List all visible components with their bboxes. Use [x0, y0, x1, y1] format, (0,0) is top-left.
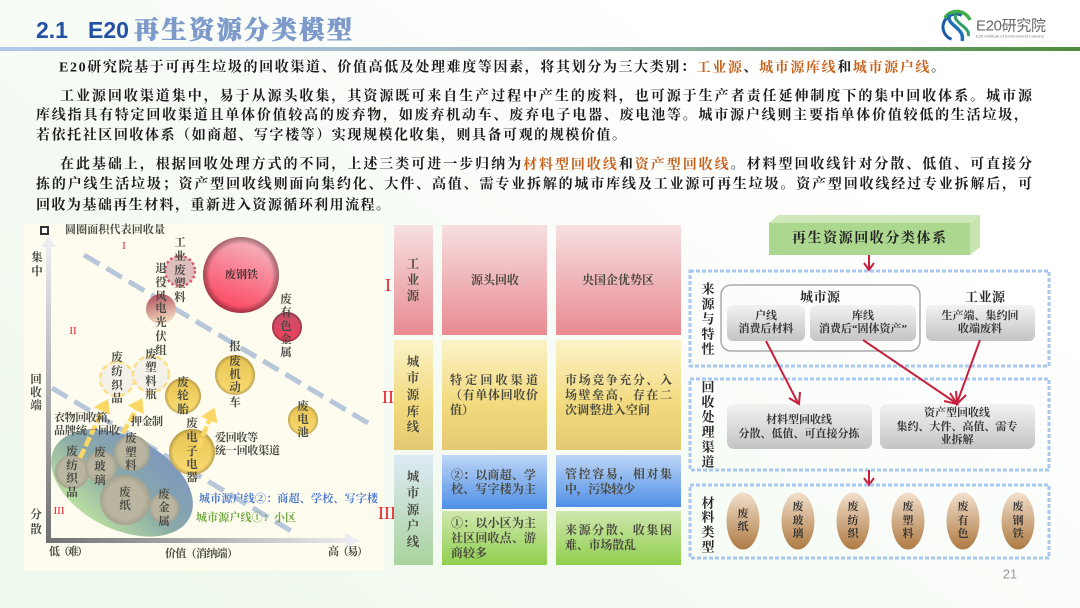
oval: 废塑料	[892, 492, 924, 550]
channel annotations: 统一回收渠道	[215, 443, 280, 457]
bubble: 退役风电光伏组件	[146, 262, 176, 357]
paragraph 3	[36, 156, 1032, 214]
panel: classification table	[378, 225, 681, 565]
row II: 次调整进入空间	[565, 402, 650, 417]
heading box	[769, 215, 980, 255]
zone divider I/II	[84, 255, 368, 423]
x axis arrow	[46, 533, 360, 548]
heading box: 再生资源回收分类体系	[792, 230, 947, 246]
oval: 废纺织: 废纺织	[848, 499, 860, 540]
row I: 央国企优势区	[582, 272, 654, 287]
card: 工业源	[926, 305, 1035, 341]
row II	[382, 340, 681, 450]
row III: 城市源户线	[407, 469, 421, 549]
arrow: 废电子电器 upgrade	[198, 416, 211, 448]
row I: 工业源	[407, 257, 421, 303]
label: 城市源户线②: 城市源户线②：商超、学校、写字楼	[199, 491, 379, 505]
card: 工业源: 生产端、集约回	[942, 308, 1018, 322]
card: 资产型回收线: 业拆解	[940, 432, 974, 446]
bubble: 废轮胎: 废轮胎	[177, 375, 190, 416]
paragraph 2	[36, 88, 1033, 144]
channel annotations: 品牌统一回收	[54, 423, 120, 437]
panel: recycling classification system	[690, 215, 1049, 558]
bubble: 废塑料瓶 (dashed): 废塑料瓶	[145, 347, 157, 401]
bubble: 废纸: 废纸	[119, 485, 131, 512]
bubble: 废金属: 废金属	[158, 487, 170, 528]
intro text	[36, 58, 1033, 214]
zone labels	[54, 240, 126, 517]
axis labels: 分散	[30, 507, 42, 536]
row II: 市场竞争充分、入	[565, 372, 672, 387]
row II: II	[382, 387, 394, 407]
arrow: 户线 to 材料型	[766, 341, 800, 404]
group: processing channels: 回收处理渠道	[701, 380, 715, 470]
bubble: 废有色金属: 废有色金属	[280, 292, 292, 359]
arrow: 库线 to 资产型	[863, 340, 957, 404]
oval: 废有色	[946, 492, 980, 550]
paragraph 2: 工业源回收渠道集中，易于从源头收集，其资源既可来自生产过程中产生的废料，也可源于生产者责任延伸制度下的集中回收体系。城市源	[60, 88, 1033, 104]
cluster ellipse: 城市源户线	[33, 408, 211, 558]
group: material types	[690, 485, 1049, 558]
bubble: 废塑料	[114, 431, 150, 472]
bubble: 报废机动车: 报废机动车	[229, 339, 241, 409]
bubble: 废纺织品 (dashed): 废纺织品	[111, 350, 124, 405]
row III	[378, 455, 681, 565]
legend text: 圆圈面积代表回收量	[65, 222, 165, 236]
panel: bubble chart	[24, 222, 384, 571]
row III: ①：以小区为主	[451, 515, 536, 530]
bubble: 废玻璃: 废玻璃	[94, 445, 106, 487]
bubble: 废电池	[288, 399, 318, 439]
row III: 难、市场散乱	[565, 537, 636, 552]
row III: III	[378, 503, 396, 523]
row I	[385, 225, 681, 335]
zone labels: II	[69, 325, 77, 337]
label: 城市源户线①: 城市源户线①：小区	[196, 510, 296, 524]
channel annotations: 衣物回收箱，	[54, 410, 118, 424]
arrow: heading to sources	[864, 255, 874, 270]
card: 库线: 库线	[852, 308, 874, 322]
group: processing channels	[690, 379, 1049, 470]
card: 户线: 消费后材料	[738, 321, 794, 335]
channel annotations	[54, 410, 280, 457]
bubble: 废金属	[149, 487, 179, 528]
axis labels	[30, 250, 368, 560]
card: 材料型回收线: 材料型回收线	[766, 412, 832, 426]
zone labels: III	[54, 505, 65, 517]
paragraph 2: 若依托社区回收体系（如商超、写字楼等）实现规模化收集，则具备可观的规模价值。	[36, 126, 626, 144]
zone labels: I	[122, 240, 126, 252]
arrow: 废纺织品 upgrade	[80, 407, 104, 458]
bubble: 废纺织品 (dashed)	[100, 350, 134, 405]
bubble: 废塑料瓶 (dashed)	[133, 347, 169, 401]
arrow: channels to materials	[864, 470, 874, 485]
paragraph 3: 回收为基础再生材料，重新进入资源循环利用流程。	[36, 196, 390, 214]
card: 材料型回收线: 分散、低值、可直接分拣	[738, 426, 860, 440]
bubble: 废纸	[100, 475, 150, 525]
channel annotations: 爱回收等	[214, 430, 258, 444]
card: 户线	[727, 305, 805, 341]
header rule	[0, 47, 1080, 51]
group: sources: 来源与特性	[701, 282, 715, 356]
page number: 21	[1003, 566, 1017, 582]
group: material types: 材料类型	[701, 496, 715, 554]
row II: （有单体回收价	[450, 387, 538, 402]
card: 工业源: 收端废料	[958, 321, 1002, 335]
card: 资产型回收线: 资产型回收线	[924, 405, 990, 419]
card: 资产型回收线: 集约、大件、高值、需专	[896, 419, 1018, 433]
row III: 校、写字楼为主	[451, 481, 536, 496]
arrow: 废塑料 upgrade	[123, 406, 138, 433]
paragraph 2: 库线指具有特定回收渠道且单体价值较高的废弃物，如废弃机动车、废弃电子电器、废电池等。城市源户线则主要指单体价值较低的生活垃圾，	[36, 106, 1028, 124]
title: 2.1	[36, 17, 68, 43]
oval: 废塑料: 废塑料	[902, 499, 914, 540]
card: 户线: 户线	[755, 308, 777, 322]
oval: 废玻璃	[782, 492, 814, 550]
bubble: 废钢铁: 废钢铁	[225, 267, 258, 281]
row III: 管控容易，相对集	[565, 466, 672, 481]
group: sources	[690, 271, 1049, 366]
title: E20	[88, 17, 129, 43]
bubble: 废电子电器	[169, 416, 215, 484]
bubble: 废纺织品 cluster	[55, 444, 89, 499]
bubble: 废轮胎	[165, 375, 201, 416]
oval: 废有色: 废有色	[958, 499, 968, 540]
row III: 中，污染较少	[565, 481, 636, 496]
row I: I	[385, 275, 391, 295]
oval: 废钢铁: 废钢铁	[1012, 499, 1024, 540]
bubble: 退役风电光伏组件: 退役风电光伏组	[155, 262, 167, 357]
channel annotations: 押金制	[131, 414, 163, 428]
title	[36, 16, 352, 44]
row III: ②：以商超、学	[451, 467, 536, 482]
oval: 废玻璃: 废玻璃	[792, 499, 804, 540]
y axis arrow	[41, 236, 56, 543]
icon: legend square	[41, 227, 48, 234]
row II: 值）	[450, 402, 474, 417]
arrow: 工业源 to 资产型	[956, 340, 980, 404]
axis labels: 回收端	[30, 373, 42, 412]
row III: 商较多	[451, 545, 487, 560]
zone divider II/III	[52, 388, 293, 532]
bubble: 工业废塑料: 工业废塑料	[174, 236, 186, 304]
bubble: 废塑料: 废塑料	[125, 431, 137, 472]
axis labels: 高（易）	[328, 544, 368, 558]
title: 再生资源分类模型	[134, 16, 352, 44]
axis labels: 集中	[31, 250, 43, 278]
row III: 来源分散、收集困	[565, 522, 672, 537]
paragraph 1: E20研究院基于可再生垃圾的回收渠道、价值高低及处理难度等因素，将其划分为三大类别：工业源、城市源库线和城市源户线。	[59, 58, 945, 76]
logo: E20 研究院	[939, 10, 1046, 44]
oval: 废钢铁	[1002, 492, 1034, 550]
paragraph 3: 拣的户线生活垃圾；资产型回收线则面向集约化、大件、高值、需专业拆解的城市库线及工业源可再生垃圾。资产型回收线经过专业拆解后，可	[36, 176, 1032, 192]
logo: E20 研究院: E20研究院	[976, 16, 1046, 34]
card: 库线	[810, 305, 916, 341]
card: 库线: 消费后“固体资产”	[819, 321, 907, 335]
bubble: 报废机动车	[215, 339, 255, 409]
bubble: 废钢铁	[203, 237, 279, 313]
bubble: 废电子电器: 废电子电器	[186, 416, 198, 484]
bubble: 废有色金属	[272, 292, 302, 359]
group: sources: 城市源	[800, 290, 841, 304]
oval: 废纸	[726, 492, 760, 550]
row II: 场壁垒高，存在二	[565, 387, 672, 402]
card: 材料型回收线	[727, 404, 872, 449]
axis labels: 价值（消纳端）	[165, 546, 238, 560]
bubble: 废电池: 废电池	[297, 399, 309, 439]
bubble: 废纺织品 cluster: 废纺织品	[66, 444, 79, 499]
row III: 社区回收点、游	[451, 530, 536, 545]
paragraph 3: 在此基础上，根据回收处理方式的不同，上述三类可进一步归纳为材料型回收线和资产型回收线。材料型回收线针对分散、低值、可直接分	[60, 156, 1032, 172]
row II: 城市源库线	[407, 354, 421, 434]
group: sources: 工业源	[965, 290, 1006, 304]
card: 资产型回收线	[880, 404, 1035, 449]
bubble: 废玻璃	[85, 445, 117, 487]
row I: 源头回收	[471, 272, 519, 287]
row II: 特定回收渠道	[450, 372, 538, 387]
bubble: 工业废塑料	[165, 236, 195, 304]
axis labels: 低（难）	[49, 544, 88, 558]
logo: E20 研究院: E20 Institute of Environment Industry	[976, 34, 1044, 38]
oval: 废纺织	[836, 492, 870, 550]
oval: 废纸: 废纸	[738, 506, 748, 533]
